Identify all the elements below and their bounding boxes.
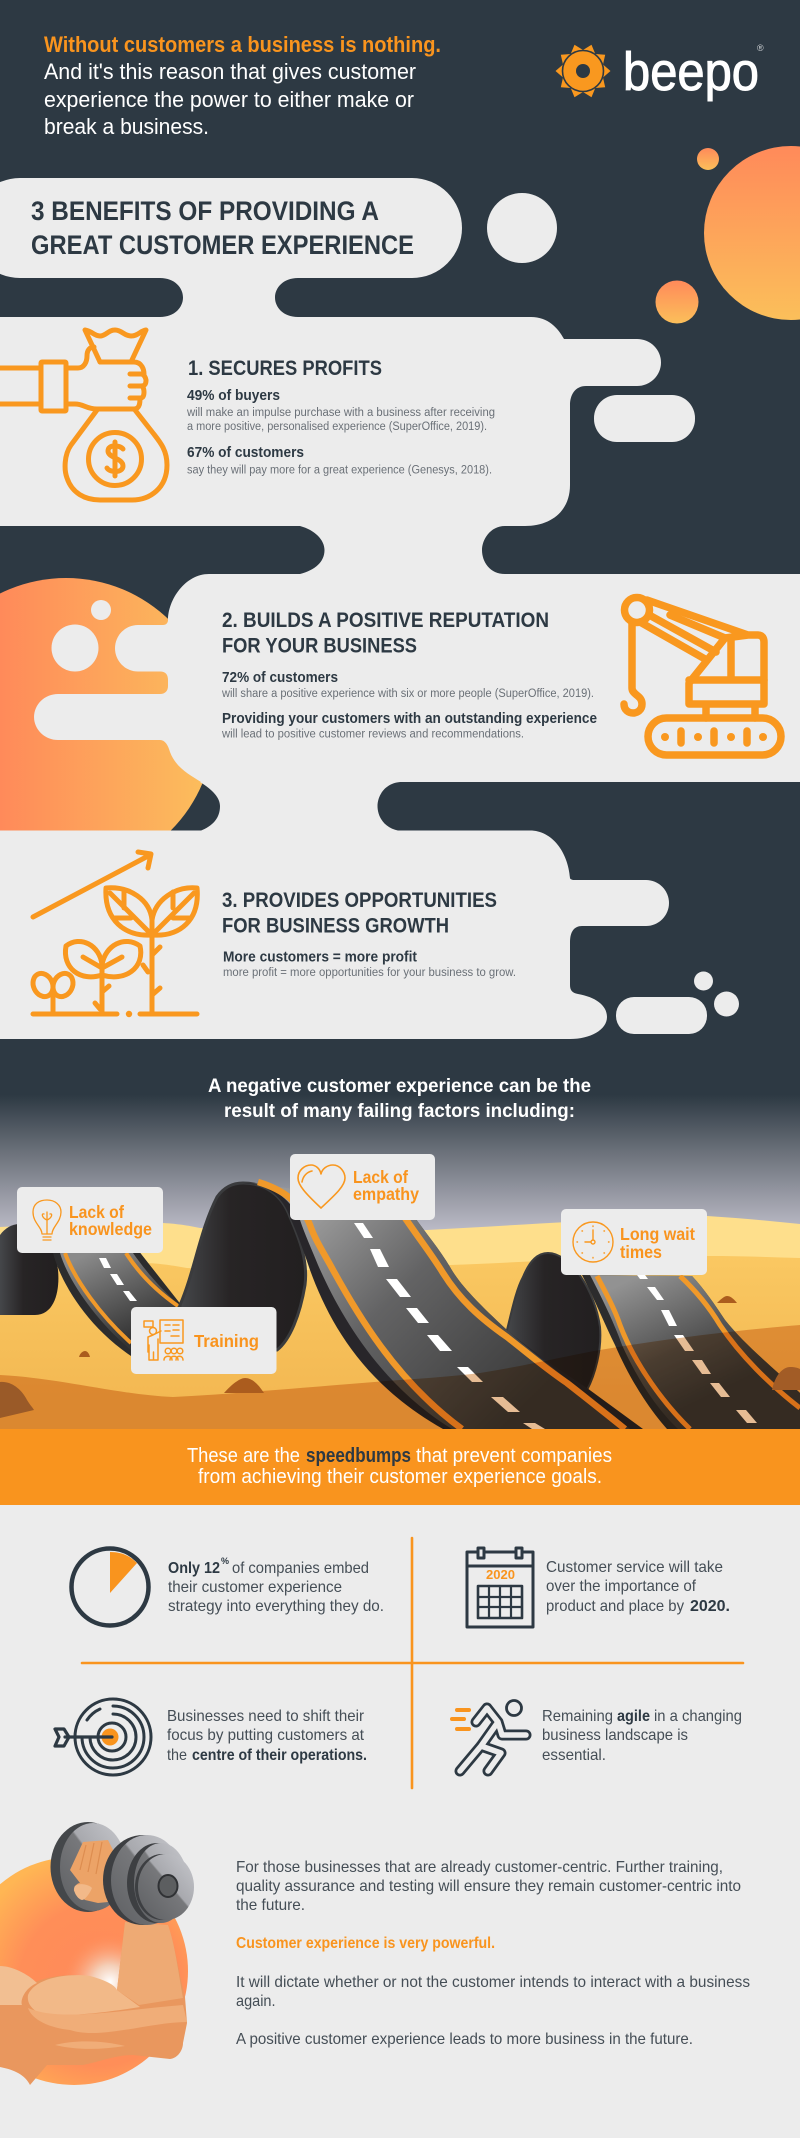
note: outstanding experience: will lead to positive customer reviews and recommendations. [221,728,524,740]
stat: 49% of buyers [186,388,495,433]
card: long wait times: Long wait [620,1224,695,1244]
card: lack of knowledge [17,1187,163,1253]
stat: 67% of customers: say they will pay more for a great experience (Genesys, 2018). [187,464,492,476]
heading [31,196,414,260]
road section: centre [243,1182,643,1429]
banner text: speedbumps [306,1445,411,1467]
decorative circles top right [487,146,800,324]
panel 1: secures profits [0,317,661,526]
fist [70,1840,113,1903]
banner text: These are the [187,1445,300,1467]
fact: centre of operations: centre of their operations. [192,1747,367,1764]
left hump [0,1224,58,1315]
right hump [507,1253,600,1390]
logo: beepo [556,42,764,102]
cross dividers [82,1538,743,1788]
arm [0,1922,187,2085]
stat: 72% of customers [221,670,594,700]
fact: customer service 2020: 2020. [690,1598,730,1615]
icon: target and arrow [55,1699,151,1775]
scene title: A negative customer experience can be the [208,1075,591,1097]
icon: runner [452,1700,526,1771]
stat: 67% of customers [187,445,492,476]
card: long wait times: times [620,1242,662,1262]
big hump [180,1183,306,1350]
paragraph: further training [236,1859,741,1914]
fact: customer service 2020: over the importance of [546,1578,697,1595]
lower section background [0,1505,800,2138]
dumbbell [50,1822,194,1925]
title: 2. BUILDS A POSITIVE REPUTATION [222,609,549,632]
panel 3: provides opportunities [0,830,669,1039]
fact: remaining agile [452,1700,742,1771]
foreground dune [0,1325,800,1429]
fact: centre of operations [55,1699,367,1775]
banner text [187,1445,612,1488]
icon: calendar [467,1548,533,1627]
icon: crane [624,598,781,755]
title: FOR YOUR BUSINESS [222,634,417,658]
decorative shapes bottom right [616,972,739,1034]
fact: customer service 2020: product and place by [546,1598,684,1615]
icon: calendar: 2020 [486,1568,515,1582]
highlight line: Customer experience is very powerful. [236,1935,495,1952]
fact: only 12%: their customer experience [168,1579,342,1596]
banner text: from achieving their customer experience goals. [198,1466,602,1488]
heading: GREAT CUSTOMER EXPERIENCE [31,230,414,260]
fact: customer service 2020: Customer service will take [546,1559,723,1576]
icon: heart [298,1165,345,1208]
card: long wait times [561,1209,707,1275]
icon: light bulb [33,1200,61,1240]
icon: growing plants with arrow [29,852,197,1014]
stat: 67% of customers: 67% of customers [187,445,304,461]
small pill [594,395,695,442]
note: outstanding experience [221,711,597,740]
card: lack of knowledge: Lack of [69,1202,124,1222]
title [222,889,497,938]
banner text: that prevent companies [416,1445,612,1467]
fact: remaining agile: in a changing [654,1708,742,1725]
paragraph: further training: For those businesses that are already customer-centric. Further training, [236,1859,723,1876]
title: 1. SECURES PROFITS [188,357,382,380]
stat: more customers: More customers = more profit [223,950,417,966]
card: lack of empathy: Lack of [353,1167,408,1187]
stat: more customers: more profit = more opportunities for your business to grow. [223,967,516,979]
card: training: Training [194,1331,259,1351]
orange banner [0,1429,800,1505]
illustration: flexing arm with dumbbell [0,1822,194,2085]
heading: 3 BENEFITS OF PROVIDING A [31,196,379,226]
fact: only 12%: of companies embed [232,1560,369,1577]
heading panel [0,178,462,278]
fact: centre of operations: Businesses need to shift their [167,1708,365,1725]
panel 2: builds a positive reputation [34,574,800,782]
paragraph: dictate [236,1974,750,2010]
icon: trainer and board [144,1320,183,1360]
fact: remaining agile: business landscape is [542,1727,688,1744]
fact: customer service 2020 [467,1548,730,1627]
gradient circle behind panel 2 [0,578,202,830]
stat: 49% of buyers: a more positive, personalised experience (SuperOffice, 2019). [187,421,487,433]
note: outstanding experience: Providing your customers with an outstanding experience [222,711,597,727]
icon: clock [573,1222,613,1262]
icon: hand holding money bag [0,330,167,500]
fact: remaining agile: Remaining [542,1708,613,1725]
fact: remaining agile: essential. [542,1747,606,1764]
intro text: experience the power to either make or [44,87,414,112]
closing text [236,1859,750,2048]
title: FOR BUSINESS GROWTH [222,914,449,938]
road section: right [582,1275,800,1429]
wordmark: beepo [623,42,759,102]
paragraph: further training: the future. [236,1897,305,1914]
paragraph: further training: quality assurance and testing will ensure they remain customer-centric into [236,1878,741,1895]
scene title: result of many failing factors including: [224,1100,575,1122]
paragraph: dictate: again. [236,1993,276,2010]
card: lack of empathy [290,1154,435,1220]
icon: sun [556,45,610,97]
registered mark: ® [757,43,764,53]
sand mounds [0,1296,800,1418]
paragraph: positive experience: A positive customer experience leads to more business in the future. [236,2031,693,2048]
intro text: And it's this reason that gives customer [44,59,416,84]
stat: more customers [223,950,516,979]
scene title [208,1075,591,1122]
intro text [44,32,441,139]
fact: centre of operations: the [167,1747,187,1764]
fact: centre of operations: focus by putting customers at [167,1727,365,1744]
stat: 49% of buyers: will make an impulse purchase with a business after receiving [186,407,495,419]
stat: 72% of customers: will share a positive experience with six or more people (SuperOffice, 2019). [221,688,594,700]
card: lack of knowledge: knowledge [69,1219,152,1239]
title: 3. PROVIDES OPPORTUNITIES [222,889,497,912]
icon: pie chart [72,1548,148,1626]
card: training [131,1307,276,1374]
paragraph: dictate: It will dictate whether or not the customer intends to interact with a business [236,1974,750,1991]
card: lack of empathy: empathy [353,1184,419,1204]
intro text: break a business. [44,114,209,139]
stat: 72% of customers: 72% of customers [222,670,338,686]
intro text: Without customers a business is nothing. [44,32,441,57]
road section: left [53,1250,182,1356]
fact: only 12% [72,1548,384,1626]
fact: remaining agile: agile [617,1708,650,1725]
stat: 49% of buyers: 49% of buyers [187,388,280,404]
title [222,609,549,658]
fact: only 12%: strategy into everything they do. [168,1598,384,1615]
fact: only 12%: Only 12 [168,1560,220,1577]
fact: only 12%: % [221,1556,229,1566]
road scene [0,1075,800,1429]
